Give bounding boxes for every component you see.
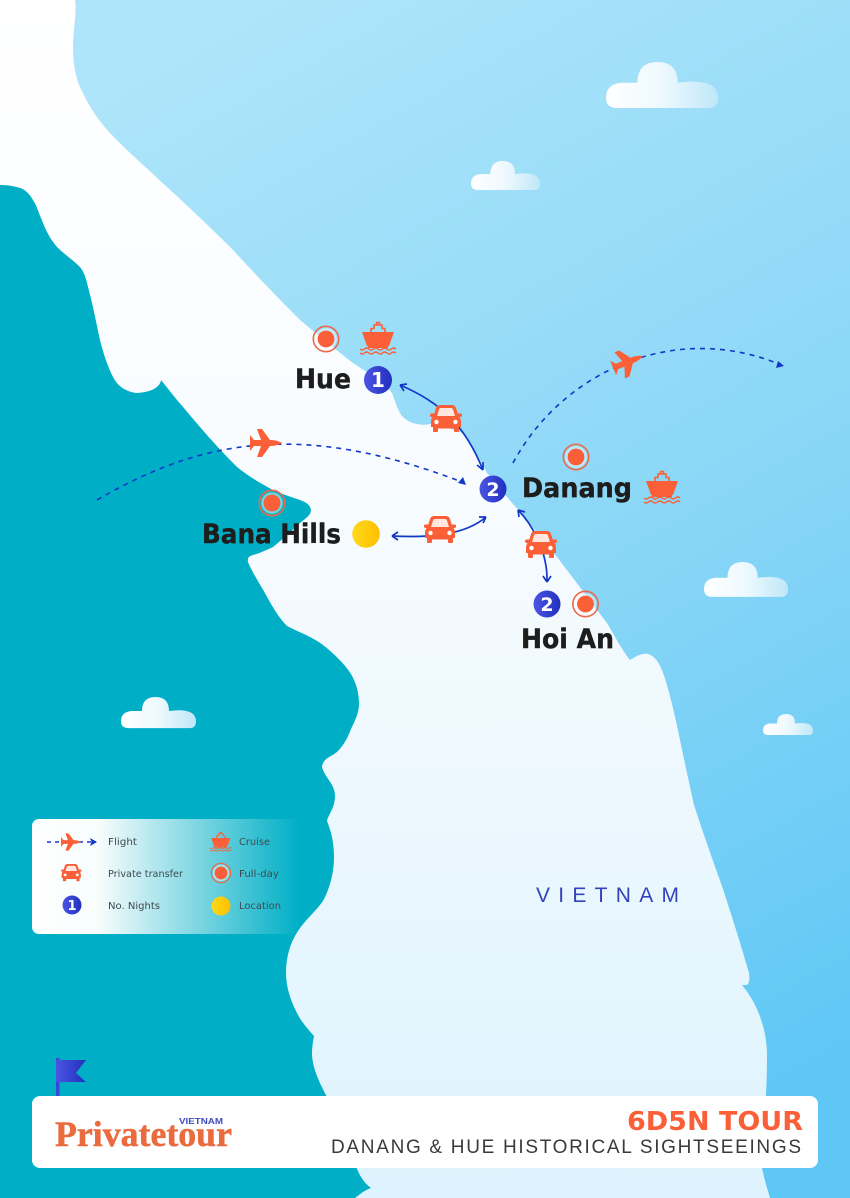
logo: Privatetour Vietnam: Privatetour [55, 1114, 232, 1154]
icon: plane inbound [247, 428, 285, 458]
legend: number of nights: 1 [67, 899, 77, 914]
label: Hue: Hue [295, 364, 351, 395]
icon: blue flag [56, 1058, 86, 1098]
label: country name: VIETNAM [536, 884, 679, 907]
legend: full-day [211, 863, 279, 883]
legend: flight [47, 833, 137, 851]
legend: location: Location [239, 901, 281, 912]
transfer route: Danang to Hoi An [518, 510, 551, 582]
subheading: tour name: DANANG & HUE HISTORICAL SIGHTSEEINGS [331, 1137, 801, 1158]
badge: 2 nights Danang: 2 [486, 479, 500, 501]
cloud: upper centre [471, 161, 540, 190]
icon: full-day Hoi An [573, 591, 598, 617]
logo: Privatetour Vietnam: VIETNAM [179, 1117, 223, 1126]
legend: flight: Flight [108, 837, 137, 848]
panel: title banner [32, 1096, 818, 1168]
cloud: small right [763, 714, 813, 735]
label: Hoi An: Hoi An [521, 624, 614, 655]
legend: location [212, 896, 281, 916]
transfer route: Danang to Bana Hills [392, 517, 486, 540]
stop: Danang [480, 444, 680, 504]
heading: tour length: 6D5N TOUR [627, 1107, 803, 1137]
badge: 1 night: 1 [371, 368, 385, 392]
icon: car Danang to Bana Hills [424, 516, 456, 543]
label: Bana Hills: Bana Hills [202, 519, 341, 550]
flight route: inbound to Danang [97, 444, 466, 500]
legend: private transfer: Private transfer [108, 869, 183, 880]
legend: cruise [210, 832, 270, 851]
icon: plane outbound [608, 343, 648, 381]
icon: car Hue to Danang [430, 405, 462, 432]
marker: location [352, 520, 380, 548]
icon: full-day Hue [313, 326, 339, 352]
icon: full-day Danang [563, 444, 589, 470]
label: Danang: Danang [522, 473, 632, 504]
legend: number of nights [62, 896, 160, 914]
icon: cruise Hue [360, 322, 396, 354]
transfer route: Hue to Danang [400, 384, 483, 470]
cloud: right middle [704, 562, 788, 597]
stop: Hoi An [521, 590, 614, 655]
flight route: outbound from Danang [513, 349, 784, 463]
panel: legend [32, 819, 300, 934]
icon: full-day Bana Hills [259, 490, 285, 516]
badge: 2 nights Danang [480, 476, 506, 502]
icon: cruise Danang [644, 472, 680, 503]
stop: Hue [295, 322, 396, 395]
stop: Bana Hills [202, 490, 380, 550]
legend: private transfer [61, 864, 183, 881]
cloud: top right [606, 62, 718, 108]
legend: cruise: Cruise [239, 837, 270, 848]
icon: car Danang to Hoi An [525, 531, 557, 558]
badge: 2 nights Hoi An: 2 [540, 594, 554, 616]
background: teal region to the west [0, 185, 450, 1198]
legend: number of nights: No. Nights [108, 901, 160, 912]
legend: full-day: Full-day [239, 869, 279, 880]
cloud: over west sea [121, 697, 196, 728]
